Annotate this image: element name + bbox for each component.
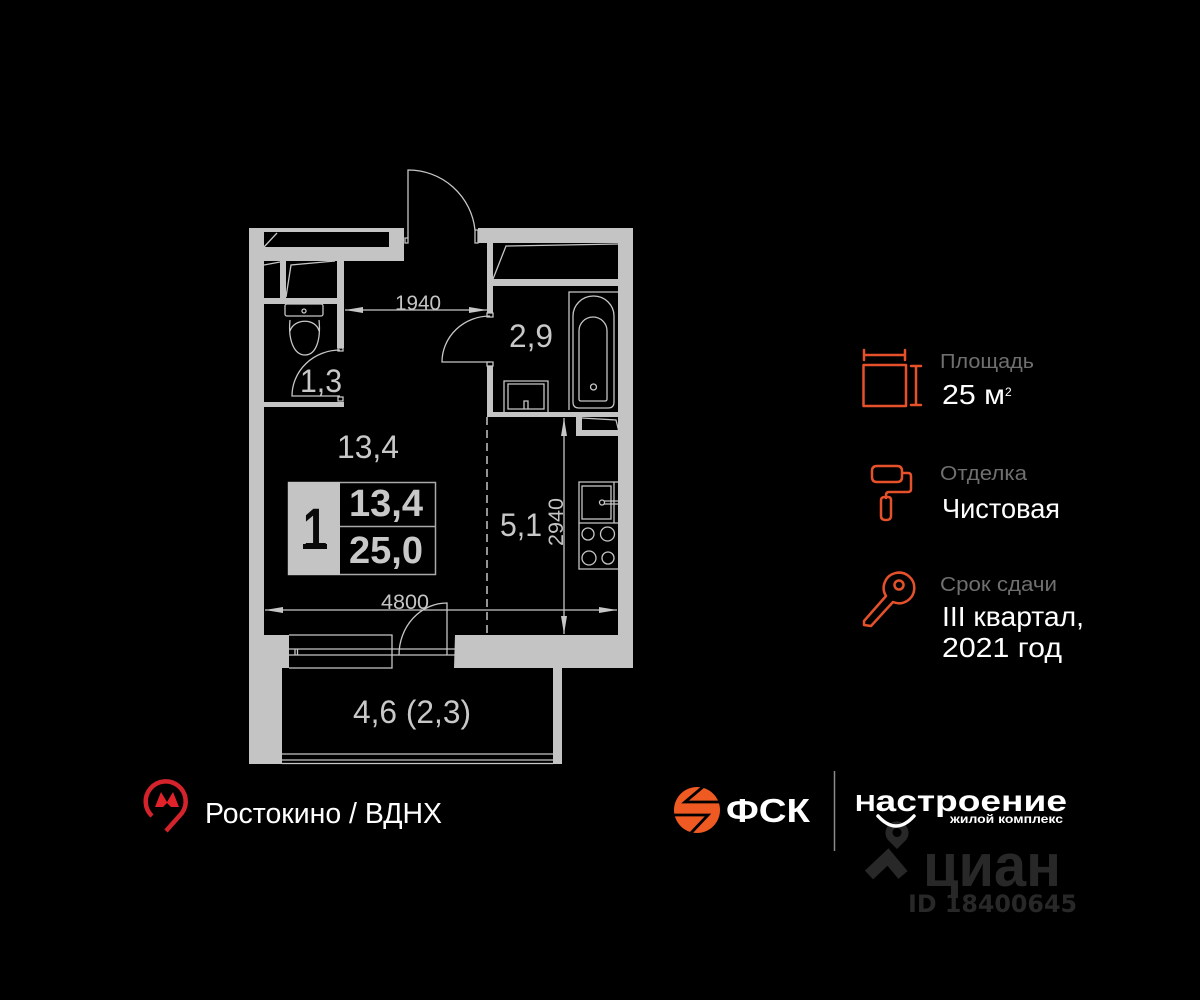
area summary box — [288, 482, 436, 575]
toilet room door — [292, 350, 340, 396]
dimension: 4800 — [265, 591, 617, 614]
dimension: 4800: 4800 — [381, 591, 429, 614]
icon: area — [864, 350, 921, 406]
info panel — [864, 350, 1084, 663]
metro station — [146, 781, 442, 831]
watermark: CIAN: ID 18400645 — [908, 890, 1077, 918]
dimension: 2940: 2940 — [545, 498, 568, 546]
room area: living room: 13,4 — [337, 429, 399, 465]
entrance door — [408, 170, 475, 238]
logo: FSK — [672, 786, 811, 834]
balcony window and door — [282, 603, 553, 764]
dimension: 1940: 1940 — [395, 292, 441, 315]
shaft and niche lines — [264, 233, 620, 436]
icon: metro pin — [146, 781, 186, 831]
dimension: 1940 — [345, 292, 487, 315]
value: area: 2 — [1005, 385, 1012, 399]
logo divider — [834, 771, 836, 851]
room area: balcony: 4,6 (2,3) — [353, 694, 471, 730]
icon: wash basin — [504, 381, 548, 412]
logo: Nastroenie residential complex: Настроение — [855, 785, 1067, 818]
watermark: CIAN — [869, 821, 1077, 918]
room area: bathroom: 2,9 — [509, 318, 553, 354]
room area: toilet: 1,3 — [300, 363, 342, 399]
value: area: 25 м — [942, 379, 1005, 410]
value: delivery date: III квартал, — [942, 601, 1084, 632]
icon: bathtub — [569, 292, 618, 410]
value: finish: Чистовая — [942, 493, 1060, 524]
logo: FSK: ФСК — [726, 792, 811, 829]
door jambs — [338, 230, 493, 401]
label: finish: Отделка — [940, 463, 1028, 485]
icon: key — [864, 573, 914, 626]
walls — [249, 228, 633, 764]
watermark: CIAN: циан — [923, 832, 1061, 899]
logo: Nastroenie residential complex — [855, 785, 1067, 826]
label: area: Площадь — [940, 351, 1034, 373]
area summary box: 1 — [303, 497, 327, 562]
icon: kitchen sink and stove — [579, 482, 618, 569]
room area: kitchen: 5,1 — [500, 507, 542, 543]
zone divider — [486, 417, 488, 636]
value: delivery date: 2021 год — [942, 632, 1062, 663]
icon: toilet — [285, 304, 323, 355]
dimension: 2940 — [545, 418, 568, 634]
station name: Ростокино / ВДНХ — [205, 798, 442, 830]
floor plan — [249, 170, 633, 764]
bathroom door — [442, 316, 490, 362]
logo: Nastroenie residential complex: жилой комплекс — [949, 812, 1063, 826]
area summary box: 25,0 — [349, 530, 423, 572]
area summary box: 13,4 — [349, 483, 423, 525]
label: delivery date: Срок сдачи — [940, 574, 1057, 596]
icon: paint roller — [872, 466, 911, 520]
